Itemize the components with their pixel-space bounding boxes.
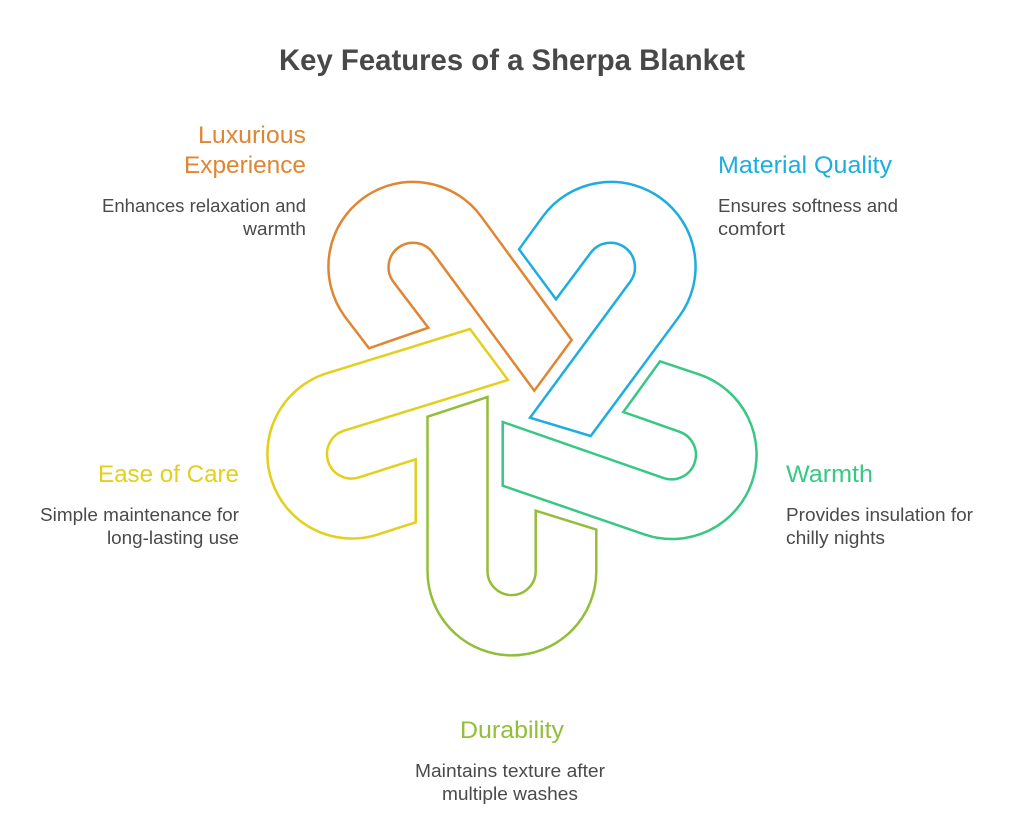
description: luxurious experience: Enhances relaxation and bbox=[102, 196, 306, 216]
heading: warmth: Warmth bbox=[786, 461, 873, 488]
description: durability bbox=[415, 761, 605, 804]
shape: durability link bbox=[428, 397, 596, 655]
label: durability bbox=[415, 717, 605, 804]
heading: luxurious experience: Experience bbox=[184, 152, 306, 179]
description: ease of care bbox=[40, 505, 239, 548]
description: durability: multiple washes bbox=[442, 784, 578, 804]
label: luxurious experience bbox=[102, 122, 306, 239]
knot diagram bbox=[267, 182, 757, 655]
description: warmth bbox=[786, 505, 973, 548]
heading: ease of care: Ease of Care bbox=[98, 461, 239, 488]
description: ease of care: Simple maintenance for bbox=[40, 505, 239, 525]
title: Key Features of a Sherpa Blanket bbox=[279, 44, 745, 77]
description: material quality: Ensures softness and bbox=[718, 196, 898, 216]
description: material quality bbox=[718, 196, 898, 239]
label: warmth bbox=[786, 461, 973, 548]
shape: warmth link bbox=[503, 361, 757, 539]
description: warmth: chilly nights bbox=[786, 528, 885, 548]
heading: luxurious experience bbox=[184, 122, 306, 179]
shape: material quality link bbox=[519, 182, 696, 436]
description: material quality: comfort bbox=[718, 219, 785, 239]
description: luxurious experience bbox=[102, 196, 306, 239]
heading: durability: Durability bbox=[460, 717, 564, 744]
description: ease of care: long-lasting use bbox=[107, 528, 239, 548]
description: luxurious experience: warmth bbox=[242, 219, 306, 239]
shape: luxurious experience link bbox=[328, 182, 572, 391]
description: durability: Maintains texture after bbox=[415, 761, 605, 781]
heading: material quality: Material Quality bbox=[718, 152, 892, 179]
heading: luxurious experience: Luxurious bbox=[198, 122, 306, 149]
label: ease of care bbox=[40, 461, 239, 548]
description: warmth: Provides insulation for bbox=[786, 505, 973, 525]
label: material quality bbox=[718, 152, 898, 239]
shape: ease of care link bbox=[267, 329, 508, 539]
